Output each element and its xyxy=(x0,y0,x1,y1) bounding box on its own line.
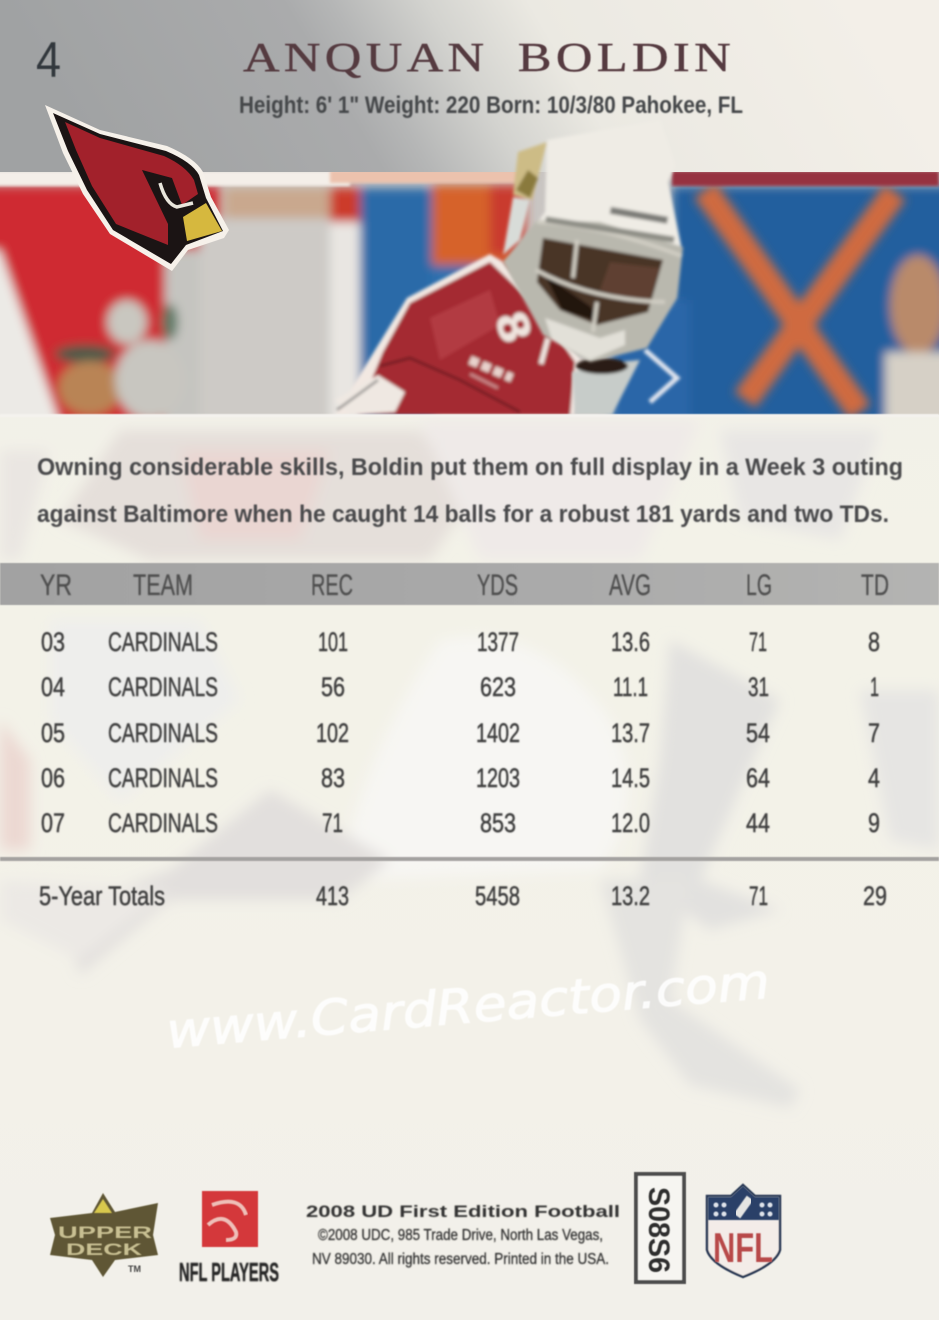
orange X on banner xyxy=(705,190,895,412)
row 06: 4 xyxy=(868,763,880,793)
row 07: 853 xyxy=(480,808,516,838)
row 03: CARDINALS xyxy=(108,627,218,657)
row 07: 07 xyxy=(41,808,65,838)
player name: ANQUAN BOLDIN xyxy=(243,34,735,80)
row 04: 31 xyxy=(748,672,769,702)
row 05: 7 xyxy=(868,718,880,748)
row 06: CARDINALS xyxy=(108,763,218,793)
row 03: 13.6 xyxy=(611,627,650,657)
row 04: 11.1 xyxy=(613,672,648,702)
row 05: 05 xyxy=(41,718,65,748)
row 03: 101 xyxy=(318,627,348,657)
totals row xyxy=(39,881,887,911)
legal text: ©2008 UDC, 985 Trade Drive, North Las Vegas, xyxy=(318,1227,603,1244)
legal text xyxy=(306,1202,620,1268)
jersey: 8 xyxy=(485,306,541,348)
row 06: 83 xyxy=(321,763,345,793)
row 03: 71 xyxy=(749,627,767,657)
helmet xyxy=(503,120,683,362)
table header band: YR xyxy=(40,569,72,602)
watermark: www.CardReactor.com xyxy=(164,954,772,1060)
row 04 xyxy=(41,672,879,702)
totals row: 413 xyxy=(316,881,349,911)
row 03: 03 xyxy=(41,627,65,657)
row 04: CARDINALS xyxy=(108,672,218,702)
row 05: 13.7 xyxy=(611,718,650,748)
row 05: 102 xyxy=(316,718,349,748)
row 07: 71 xyxy=(322,808,343,838)
totals row: 29 xyxy=(863,881,887,911)
row 06: 14.5 xyxy=(611,763,650,793)
row 05: 54 xyxy=(746,718,770,748)
photo: player xyxy=(335,120,683,415)
row 03 xyxy=(41,627,880,657)
code box: S08S6 xyxy=(642,1187,675,1273)
legal text: NV 89030. All rights reserved. Printed in the USA. xyxy=(312,1251,609,1268)
row 07 xyxy=(41,808,880,838)
table header band: REC xyxy=(311,569,353,602)
row 03: 1377 xyxy=(477,627,519,657)
header gradient panel xyxy=(0,0,939,175)
row 06: 06 xyxy=(41,763,65,793)
jersey xyxy=(335,254,585,415)
row 05: 1402 xyxy=(476,718,520,748)
photo: blurred background crowd and banners xyxy=(0,170,939,440)
ghosted player watermark background xyxy=(0,420,939,1108)
code box xyxy=(636,1174,684,1282)
bio paragraph: against Baltimore when he caught 14 balls for a robust 181 yards and two TDs. xyxy=(37,501,889,528)
player vitals: Height: 6' 1" Weight: 220 Born: 10/3/80 Pahokee, FL xyxy=(239,92,743,119)
row 03: 8 xyxy=(868,627,880,657)
row 04: 623 xyxy=(480,672,516,702)
row 05 xyxy=(41,718,880,748)
icon: upper deck logo: UPPER xyxy=(58,1223,152,1242)
icon: cardinals logo xyxy=(45,105,229,271)
row 07: 44 xyxy=(746,808,770,838)
row 04: 1 xyxy=(870,672,879,702)
bio paragraph xyxy=(37,454,903,528)
row 06: 1203 xyxy=(476,763,520,793)
icon: nfl players logo xyxy=(179,1191,279,1287)
row 07: 12.0 xyxy=(611,808,650,838)
icon: upper deck logo: DECK xyxy=(66,1240,143,1259)
row 05: CARDINALS xyxy=(108,718,218,748)
totals row: 5-Year Totals xyxy=(39,881,165,911)
icon: nfl players logo: NFL PLAYERS xyxy=(179,1257,279,1287)
table header band: LG xyxy=(746,569,772,602)
row 06: 64 xyxy=(746,763,770,793)
table header band: AVG xyxy=(609,569,651,602)
bio paragraph: Owning considerable skills, Boldin put them on full display in a Week 3 outing xyxy=(37,454,903,481)
card number: 4 xyxy=(36,32,61,88)
icon: upper deck logo: TM xyxy=(128,1264,141,1274)
table header band xyxy=(0,563,939,605)
row 04: 04 xyxy=(41,672,65,702)
photo bottom edge xyxy=(0,414,939,417)
row 07: CARDINALS xyxy=(108,808,218,838)
icon: upper deck logo xyxy=(50,1193,158,1277)
table header band: YDS xyxy=(477,569,518,602)
legal text: 2008 UD First Edition Football xyxy=(306,1202,620,1221)
table header band: TEAM xyxy=(133,569,193,602)
totals row: 71 xyxy=(749,881,768,911)
icon: nfl shield xyxy=(707,1185,780,1277)
stats table xyxy=(0,563,939,911)
totals row: 5458 xyxy=(475,881,520,911)
table header band: TD xyxy=(861,569,889,602)
totals row: 13.2 xyxy=(611,881,650,911)
row 07: 9 xyxy=(868,808,880,838)
row 04: 56 xyxy=(321,672,345,702)
icon: nfl shield: NFL xyxy=(713,1224,773,1271)
neck and lower gear xyxy=(572,350,677,415)
row 06 xyxy=(41,763,880,793)
